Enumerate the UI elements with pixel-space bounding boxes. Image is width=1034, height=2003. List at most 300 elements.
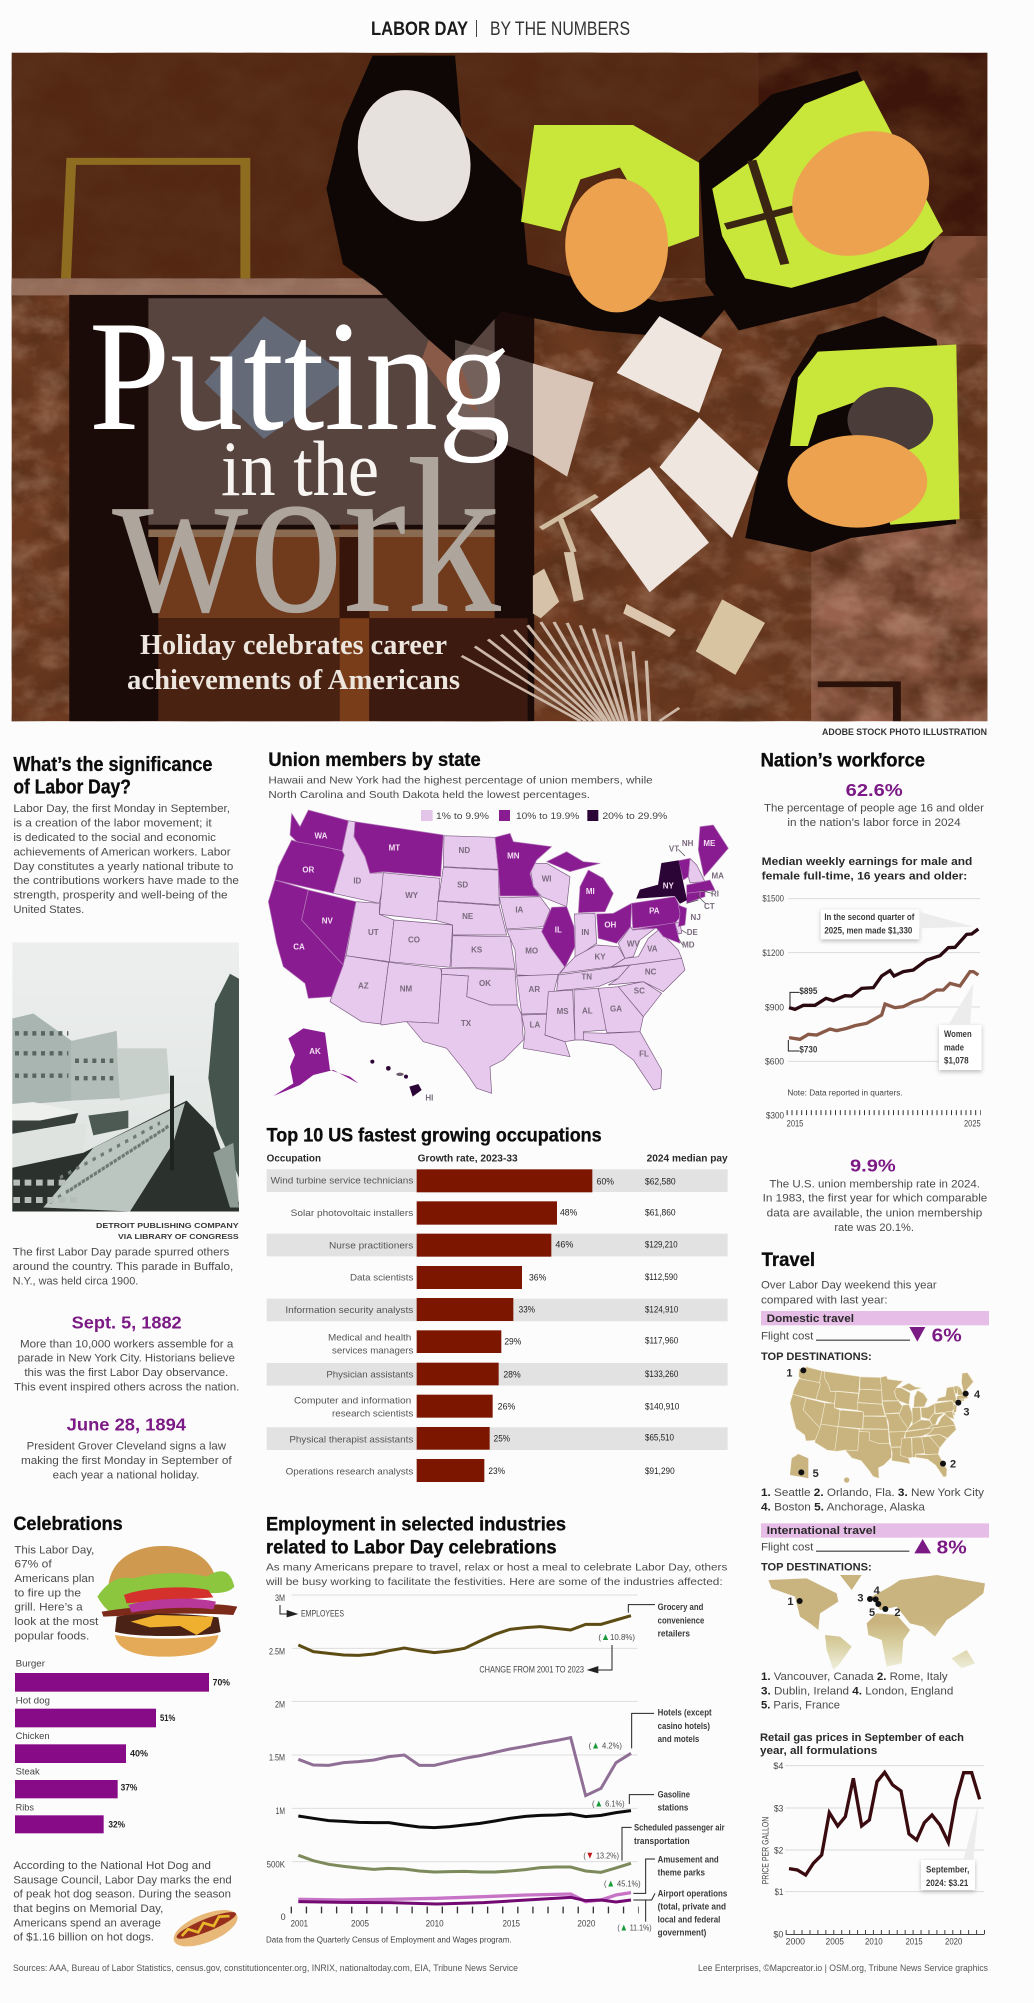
state labels: WV [627,940,640,949]
bar chart: popular foods: Chicken [16,1731,50,1741]
callout: September, [926,1864,969,1874]
text: Sept. 5, 1882: This event inspired others across the nation. [14,1381,239,1393]
y axis labels: $300 [766,1111,784,1121]
x axis labels: 2025 [964,1119,981,1129]
percent changes: (▼ 13.2%) [583,1850,619,1861]
stat text: in the nation’s labor force in 2024 [787,817,961,829]
occupation labels: Data scientists [350,1273,414,1283]
note: Note: Data reported in quarters. [787,1089,903,1098]
state labels: CO [408,935,420,944]
x axis ticks [787,1105,981,1120]
x axis labels: 2015 [787,1119,803,1129]
y axis labels: $600 [765,1056,784,1066]
industry labels: retailers [658,1629,690,1639]
text: Sept. 5, 1882: parade in New York City. Historians believe [18,1352,235,1364]
title: work [112,414,501,660]
tools on the table [533,495,765,675]
industry labels: stations [658,1802,688,1812]
state labels: NV [322,916,334,925]
x axis labels [787,1119,981,1129]
intro text: popular foods. [14,1630,89,1642]
heading: Union members by state [268,750,481,771]
US choropleth map [268,810,728,1103]
state labels: ME [703,839,716,848]
y axis labels: 1M [276,1806,285,1816]
domestic flight cost: Flight cost [761,1330,814,1342]
destination markers: 4 [874,1585,881,1597]
callout: men: In the second quarter of [824,912,915,922]
y axis labels: 2M [275,1699,285,1709]
x axis labels: 2005 [826,1936,844,1946]
intro text: is a creation of the labor movement; it [13,817,212,829]
percent changes: (▲ 6.1%) [592,1799,625,1810]
median pay: $65,510 [645,1433,674,1443]
intro text [14,1544,99,1642]
hot dog text [13,1860,232,1944]
table surface [12,283,987,721]
text: Sept. 5, 1882: More than 10,000 workers assemble for a [20,1338,235,1350]
state labels: VT [669,845,679,854]
international flight cost: Flight cost [761,1542,814,1554]
top destinations heading: TOP DESTINATIONS: [761,1562,872,1574]
photo caption: around the country. This parade in Buffalo, [13,1261,233,1273]
text: June 28, 1894: each year a national holiday. [53,1469,199,1481]
state labels: DE [687,928,699,937]
column headers: Growth rate, 2023-33 [418,1154,518,1165]
domestic destinations list: 4. Boston 5. Anchorage, Alaska [761,1502,926,1514]
x axis labels: 2010 [426,1919,444,1929]
callout: 2024: $3.21 [926,1878,968,1888]
median pay: $140,910 [645,1402,679,1412]
description [268,775,653,801]
panel: celebrations [13,1514,242,1954]
callout: women: made [944,1042,964,1052]
stat: 9.9%: 9.9% [850,1156,896,1176]
y axis labels: 0 [281,1912,286,1922]
state labels: IL [555,925,562,934]
x axis labels: 2000 [786,1936,805,1946]
bars [417,1169,592,1482]
occupation labels: Solar photovoltaic installers [291,1208,414,1218]
travel intro: Over Labor Day weekend this year [761,1279,937,1291]
earnings line chart [762,894,982,1129]
hot dog text: that begins on Memorial Day, [13,1903,163,1915]
photo caption: The first Labor Day parade spurred others [13,1246,230,1258]
bar chart: popular foods: Hot dog [16,1695,50,1705]
state labels: WY [405,891,419,900]
callout: men: 2025, men made $1,330 [824,925,912,935]
occupation labels: Computer and information [294,1396,411,1406]
growth percentages: 26% [498,1401,515,1411]
change annotation: CHANGE FROM 2001 TO 2023 [479,1664,584,1674]
text: June 28, 1894 [21,1440,232,1481]
percent changes: (▲10.8%) [598,1632,635,1643]
y axis labels: $3 [774,1803,783,1813]
domestic travel band: Domestic travel [767,1313,854,1325]
heading: related to Labor Day celebrations [266,1537,557,1558]
international travel band: International travel [767,1525,876,1537]
x axis labels [291,1919,595,1929]
callout [921,1803,979,1892]
state labels: ID [353,876,362,885]
bar chart: popular foods: Ribs [16,1802,35,1812]
growth percentages: 46% [555,1239,573,1249]
callout: women: $1,078 [944,1056,969,1066]
photo credit [96,1222,240,1241]
icon: burger [97,1546,237,1657]
y axis labels: 3M [275,1593,285,1603]
date: June 28, 1894: June 28, 1894 [67,1416,187,1435]
vest 1 [521,125,699,248]
axis title: PRICE PER GALLON [760,1817,770,1884]
text: June 28, 1894: making the first Monday in September of [21,1455,232,1467]
intro text: achievements of American workers. Labor [13,846,231,858]
line: women [789,972,978,1039]
graphics credit: Lee Enterprises, ©Mapcreator.io | OSM.org, Tribune News Service graphics [698,1963,988,1974]
state labels: TX [461,1019,472,1028]
line: men [789,929,978,1009]
Alaska [273,1028,358,1096]
occupation labels [271,1176,414,1477]
state labels: ND [459,846,470,855]
state labels: GA [610,1005,622,1014]
description [265,1563,727,1588]
parade photo [12,942,239,1211]
state labels: OR [302,866,315,875]
industry labels: Hotels (except [658,1708,712,1718]
intro text: is dedicated to the social and economic [13,832,217,843]
state labels: AR [529,985,540,994]
x axis labels: 2001 [291,1919,308,1929]
state labels: OH [604,920,617,929]
papers [455,316,758,592]
state labels: MS [557,1007,569,1016]
data note: Data from the Quarterly Census of Employment and Wages program. [266,1935,512,1944]
state labels: HI [425,1094,433,1103]
industry labels: government) [658,1928,706,1938]
occupation labels: Wind turbine service technicians [271,1176,414,1186]
Hawaii [370,1060,422,1097]
hot dog text: of peak hot dog season. During the season [13,1889,231,1901]
bar chart: popular foods [15,1659,230,1833]
stat text: The U.S. union membership rate in 2024. [769,1178,980,1190]
title: Holiday celebrates career [140,630,447,661]
title: Putting [89,289,511,464]
price line [789,1772,980,1875]
hot dog text: Sausage Council, Labor Day marks the end [13,1874,232,1886]
industry labels: Amusement and [658,1854,719,1864]
state labels: FL [639,1049,649,1058]
row bands [267,1169,728,1450]
description: As many Americans prepare to travel, relax or host a meal to celebrate Labor Day, others [266,1563,727,1574]
arm and hand [422,340,478,413]
y axis labels [762,894,784,1121]
state labels: CA [293,943,305,952]
line: hotels [298,1738,631,1796]
column headers: 2024 median pay [647,1154,728,1165]
bar chart: popular foods: Burger [16,1659,45,1669]
hero photo illustration [12,53,987,721]
state labels [293,831,724,1103]
state labels: LA [530,1021,541,1030]
state labels: OK [479,979,491,988]
domestic flight cost [761,1325,962,1346]
orange helmet 2 [770,118,951,269]
travel intro: compared with last year: [761,1294,888,1306]
employees annotation: EMPLOYEES [301,1609,344,1619]
bar chart: popular foods: 40% [130,1748,148,1758]
median pay: $91,290 [645,1466,675,1476]
destination markers: 4 [974,1389,981,1401]
panel: union rate and travel [761,1156,989,1363]
state labels: CT [704,902,715,911]
y axis labels: $4 [773,1761,783,1771]
heading: Top 10 US fastest growing occupations [267,1126,602,1147]
chart heading: Median weekly earnings for male and [762,856,972,868]
intro text: look at the most [14,1616,99,1628]
growth percentages: 28% [503,1369,521,1379]
stat: 62.6%: 62.6% [846,780,903,800]
international flight cost: 8% [937,1536,967,1557]
stat text: rate was 20.1%. [834,1222,914,1234]
hot dog text: of $1.16 billion on hot dogs. [13,1932,154,1944]
yellow floor marking [66,161,245,278]
intro text: Day constitutes a yearly national tribute to [13,860,233,872]
state labels: NC [645,968,657,977]
text: June 28, 1894: President Grover Cleveland signs a law [27,1440,227,1452]
international destinations list: 3. Dublin, Ireland 4. London, England [761,1685,953,1697]
title: achievements of Americans [127,665,460,696]
heading [266,1515,566,1558]
heading: What’s the significance [13,753,212,775]
dark title panel [69,295,534,721]
text: Sept. 5, 1882 [14,1338,239,1393]
median pay: $61,860 [645,1208,676,1218]
industry labels: transportation [634,1836,690,1846]
occupation labels: services managers [332,1346,414,1356]
chart heading [762,856,972,882]
bar chart: popular foods: 32% [108,1820,125,1830]
industry labels: Gasoline [658,1789,690,1799]
x axis labels: 2015 [503,1919,520,1929]
industry labels: casino hotels) [658,1721,710,1731]
destination markers: 5 [869,1607,875,1619]
y axis labels: $1 [775,1887,783,1897]
vest 3 [790,344,960,525]
state labels: WI [542,875,552,884]
y axis labels: 500K [267,1859,285,1869]
line: airport operations [298,1897,631,1904]
industry labels: theme parks [658,1868,705,1878]
destination markers: 2 [950,1458,956,1470]
Alaska and Hawaii [790,1454,849,1483]
photo credit: VIA LIBRARY OF CONGRESS [118,1233,240,1241]
occupation labels: Information security analysts [285,1305,414,1315]
chart heading [760,1732,964,1757]
state labels: KY [594,953,606,962]
annotation: $895: $895 [799,986,817,996]
stat text [763,1178,987,1234]
chart heading: Retail gas prices in September of each [760,1732,964,1744]
median pay: $117,960 [645,1336,678,1346]
leader lines [622,1605,655,1922]
icon: hot dog [169,1902,242,1954]
growth percentages: 60% [597,1177,614,1187]
photo credit: DETROIT PUBLISHING COMPANY [96,1222,240,1230]
y axis labels [773,1761,783,1939]
growth percentages [488,1177,614,1476]
y axis labels: $0 [773,1929,783,1939]
panel: union members by state [268,750,728,1103]
international travel band [761,1523,989,1538]
state labels: MA [711,871,724,880]
header: BY THE NUMBERS [490,19,630,40]
callout: women: Women [944,1029,972,1039]
state labels: VA [647,945,658,954]
legend: 1% to 9.9% [436,811,489,821]
domestic destinations map [786,1367,981,1483]
multi-line employment chart [267,1593,727,1938]
state labels: SC [634,987,645,996]
destination markers [787,1585,900,1619]
state labels: NJ [691,913,701,922]
state labels: RI [711,890,719,899]
photo caption: N.Y., was held circa 1900. [13,1275,138,1287]
percent changes [583,1632,652,1933]
state labels: IA [515,905,524,914]
state labels: AL [582,1007,593,1016]
state labels: WA [315,831,328,840]
median pay: $133,260 [645,1369,678,1379]
sources: Sources: AAA, Bureau of Labor Statistics, census.gov, constitutioncenter.org, INRIX, nationaltoday.com, EIA, Tribune News Service [13,1963,518,1974]
growth percentages: 25% [494,1434,510,1444]
international destinations list: 5. Paris, France [761,1700,840,1712]
orange helmet 3 [787,435,927,528]
top destinations heading: TOP DESTINATIONS: [761,1351,872,1363]
destination markers [786,1367,981,1480]
state labels: KS [471,946,483,955]
destination markers: 3 [857,1593,863,1605]
x axis labels: 2005 [351,1919,369,1929]
intro text: This Labor Day, [14,1544,94,1556]
bar chart: popular foods: 51% [160,1713,175,1723]
callout: men [821,909,973,941]
intro text: 67% of [14,1559,53,1571]
state labels: AK [309,1047,321,1056]
line: air transportation [298,1855,631,1872]
state labels: MT [389,844,400,853]
heading: Nation’s workforce [761,751,925,772]
column headers: Occupation [267,1154,321,1165]
line: amusement parks [298,1893,631,1902]
description: North Carolina and South Dakota held the lowest percentages. [268,790,590,801]
intro text: United States. [13,904,84,915]
x axis labels: 2020 [945,1936,962,1946]
industry labels: Airport operations [658,1889,727,1899]
growth percentages: 29% [504,1337,521,1347]
y axis labels: $2 [774,1845,783,1855]
state labels: SD [457,880,468,889]
heading [13,753,212,798]
x axis labels: 2020 [577,1919,595,1929]
growth percentages: 48% [560,1207,577,1217]
state labels: NE [462,912,474,921]
title [89,289,511,696]
x axis labels [786,1936,962,1946]
chart heading: year, all formulations [760,1745,877,1757]
panel: significance of Labor Day [12,753,240,1481]
heading: travel: Travel [762,1250,815,1271]
bar chart: popular foods: 70% [213,1677,230,1687]
growth percentages: 36% [529,1273,546,1283]
photo credit: ADOBE STOCK PHOTO ILLUSTRATION [822,727,987,738]
photo caption [13,1246,233,1287]
intro text: Americans plan [14,1573,94,1585]
bar chart: popular foods: 37% [121,1782,137,1792]
heading: Employment in selected industries [266,1515,566,1536]
median pay: $124,910 [645,1305,678,1315]
stat text [764,803,984,829]
y axis labels: 1.5M [269,1753,285,1763]
domestic flight cost: 6% [932,1325,962,1346]
median pay [645,1177,679,1476]
intro text: grill. Here’s a [14,1602,83,1614]
median pay: $129,210 [645,1240,678,1250]
state labels: MN [507,851,520,860]
vest 2 [712,80,943,288]
domestic destinations list [761,1487,984,1514]
destination markers: 5 [813,1468,819,1480]
annotation: $895 [790,986,817,1007]
occupation labels: Physician assistants [326,1370,414,1380]
chart heading: female full-time, 16 years and older: [762,870,967,882]
line: grocery [298,1616,631,1655]
occupation labels: Physical therapist assistants [289,1434,414,1444]
intro text [13,803,239,915]
legend: 20% to 29.9% [602,811,667,821]
state labels: UT [368,928,379,937]
state labels: TN [581,973,592,982]
column headers [267,1154,728,1165]
panel: nation's workforce [761,751,984,1129]
line: gasoline stations [298,1811,631,1828]
x axis labels: 2010 [865,1936,883,1946]
hot dog text: According to the National Hot Dog and [13,1860,211,1872]
title: in the [221,425,379,512]
stat text: data are available, the union membership [767,1207,982,1219]
x axis [786,1932,985,1935]
industry labels: and motels [658,1734,699,1744]
header: LABOR DAY [371,19,468,40]
occupation labels: Operations research analysts [286,1467,414,1477]
industry labels: (total, private and [658,1902,726,1912]
growth percentages: 23% [488,1466,505,1476]
header [371,19,630,40]
percent changes: (▲ 4.2%) [589,1740,622,1751]
industry labels: Scheduled passenger air [634,1823,725,1833]
orange helmet 1 [565,178,668,312]
y axis labels [267,1593,286,1922]
growth percentages: 33% [519,1304,535,1314]
legend: 10% to 19.9% [516,811,579,821]
median pay: $112,590 [645,1272,678,1282]
intro text: Labor Day, the first Monday in September, [13,803,230,814]
state labels: MD [682,941,695,950]
panel: employment in selected industries [265,1515,727,1944]
heading: of Labor Day? [13,776,131,798]
text: Sept. 5, 1882: this was the first Labor Day observance. [24,1367,228,1378]
destination markers: 1 [786,1367,792,1379]
